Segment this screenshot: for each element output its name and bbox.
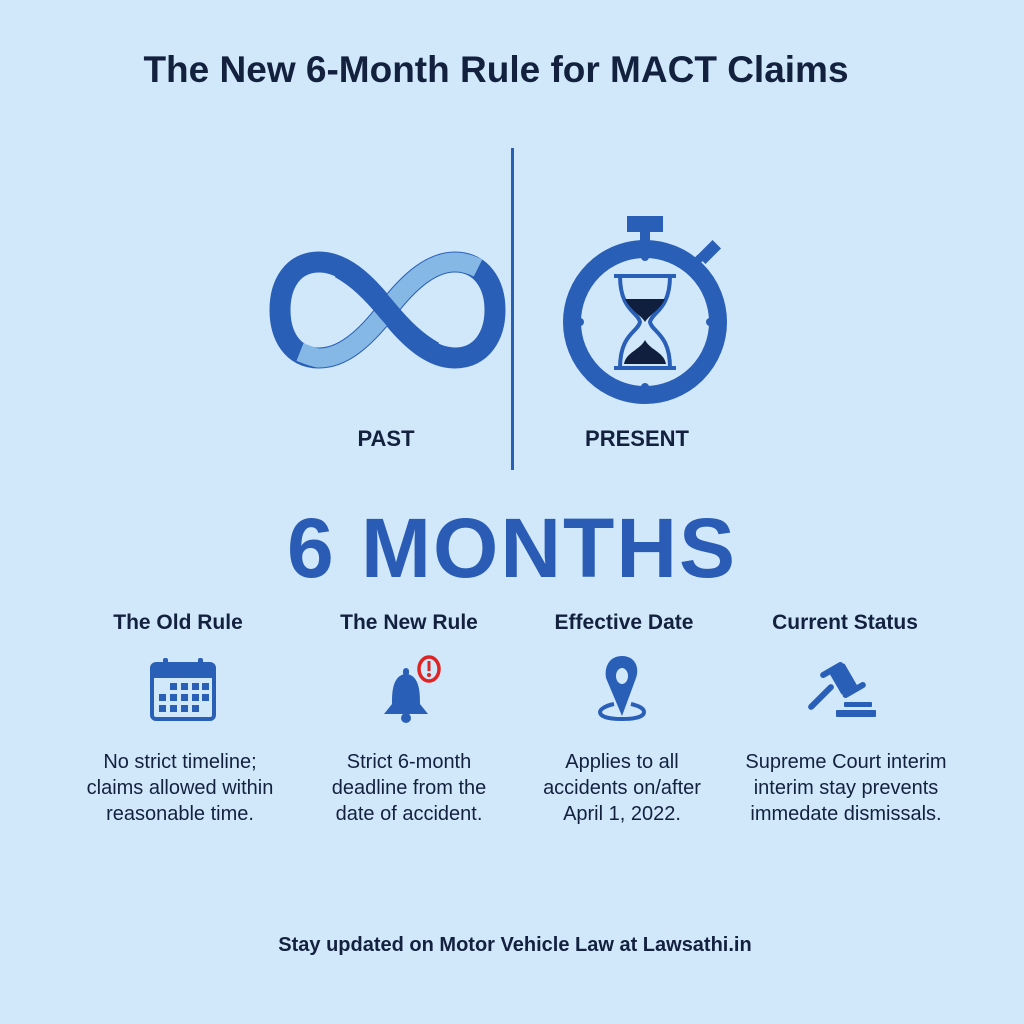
text 2: date of accident.	[336, 803, 482, 825]
text 4: Supreme Court interim	[745, 751, 947, 773]
text 2: deadline from the	[332, 777, 486, 799]
column 2: The New Rule	[340, 611, 478, 634]
icon: calendar	[150, 658, 216, 721]
column 3: Effective Date	[555, 611, 693, 634]
text 1: No strict timeline;	[103, 751, 257, 773]
label: past: PAST	[357, 426, 415, 451]
text 1: reasonable time.	[106, 803, 254, 825]
text 3: April 1, 2022.	[563, 803, 681, 825]
text 3: Applies to all	[565, 751, 679, 773]
text 1: claims allowed within	[87, 777, 273, 799]
text 2	[332, 751, 486, 825]
icon: location pin	[598, 656, 646, 721]
label: present: PRESENT	[585, 426, 689, 451]
title: The New 6-Month Rule for MACT Claims	[143, 49, 849, 90]
text 4	[745, 751, 947, 825]
icon: bell alert	[384, 655, 441, 723]
text 2: Strict 6-month	[347, 751, 471, 773]
text 4: interim stay prevents	[754, 777, 938, 799]
big number: 6 MONTHS	[287, 501, 737, 595]
column 4: Current Status	[772, 611, 918, 634]
column 1: The Old Rule	[113, 611, 243, 634]
footer: Stay updated on Motor Vehicle Law at Lawsathi.in	[278, 934, 752, 956]
text 3	[543, 751, 701, 825]
text 4: immedate dismissals.	[750, 803, 942, 825]
text 3: accidents on/after	[543, 777, 701, 799]
divider	[511, 148, 514, 470]
text 1	[87, 751, 273, 825]
icon: gavel	[808, 662, 876, 717]
